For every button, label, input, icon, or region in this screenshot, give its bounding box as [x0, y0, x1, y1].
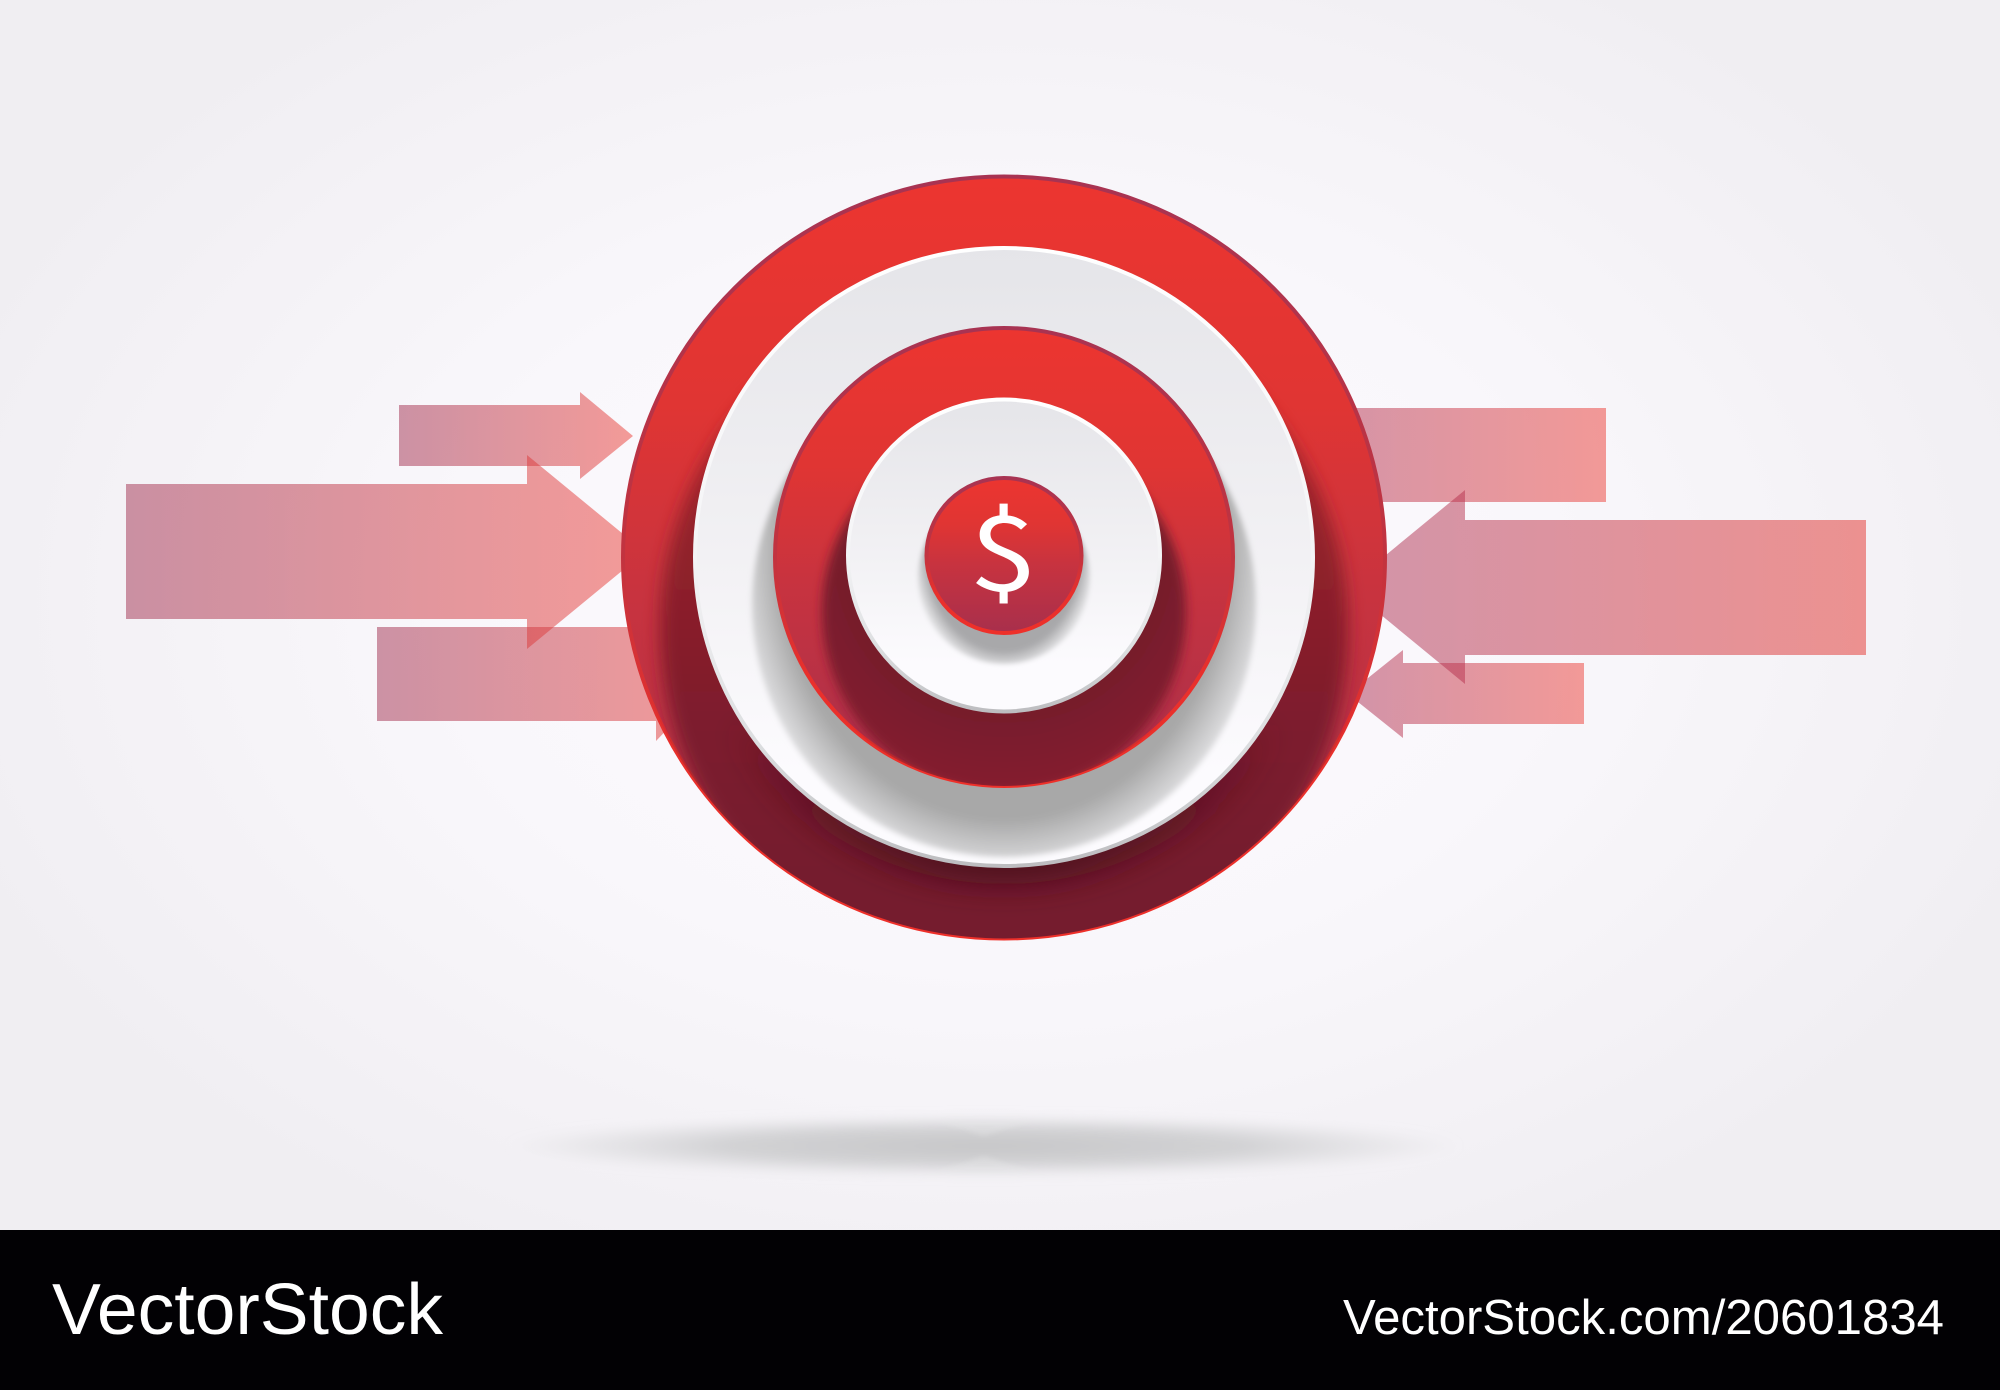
outer white ring — [695, 248, 1313, 866]
target: concentric discs — [623, 176, 1385, 974]
arrow: lower right — [1348, 650, 1584, 738]
arrow: upper left — [399, 392, 633, 479]
arrow: large left — [126, 455, 645, 649]
inner white disc — [848, 400, 1160, 712]
arrow: lower left — [377, 607, 720, 741]
arrow: upper right — [1300, 408, 1606, 502]
footer image id: VectorStock.com/20601834 — [1343, 1291, 1944, 1345]
ground shadow — [506, 1115, 1462, 1177]
footer bar — [0, 1230, 2000, 1390]
arrow: large right — [1347, 490, 1866, 684]
icon: dollar sign: $ — [969, 470, 1037, 621]
middle red disc — [775, 328, 1233, 794]
outer red disc — [623, 176, 1385, 974]
footer brand: VectorStock — [52, 1270, 444, 1350]
center red disc with dollar icon — [926, 470, 1082, 633]
